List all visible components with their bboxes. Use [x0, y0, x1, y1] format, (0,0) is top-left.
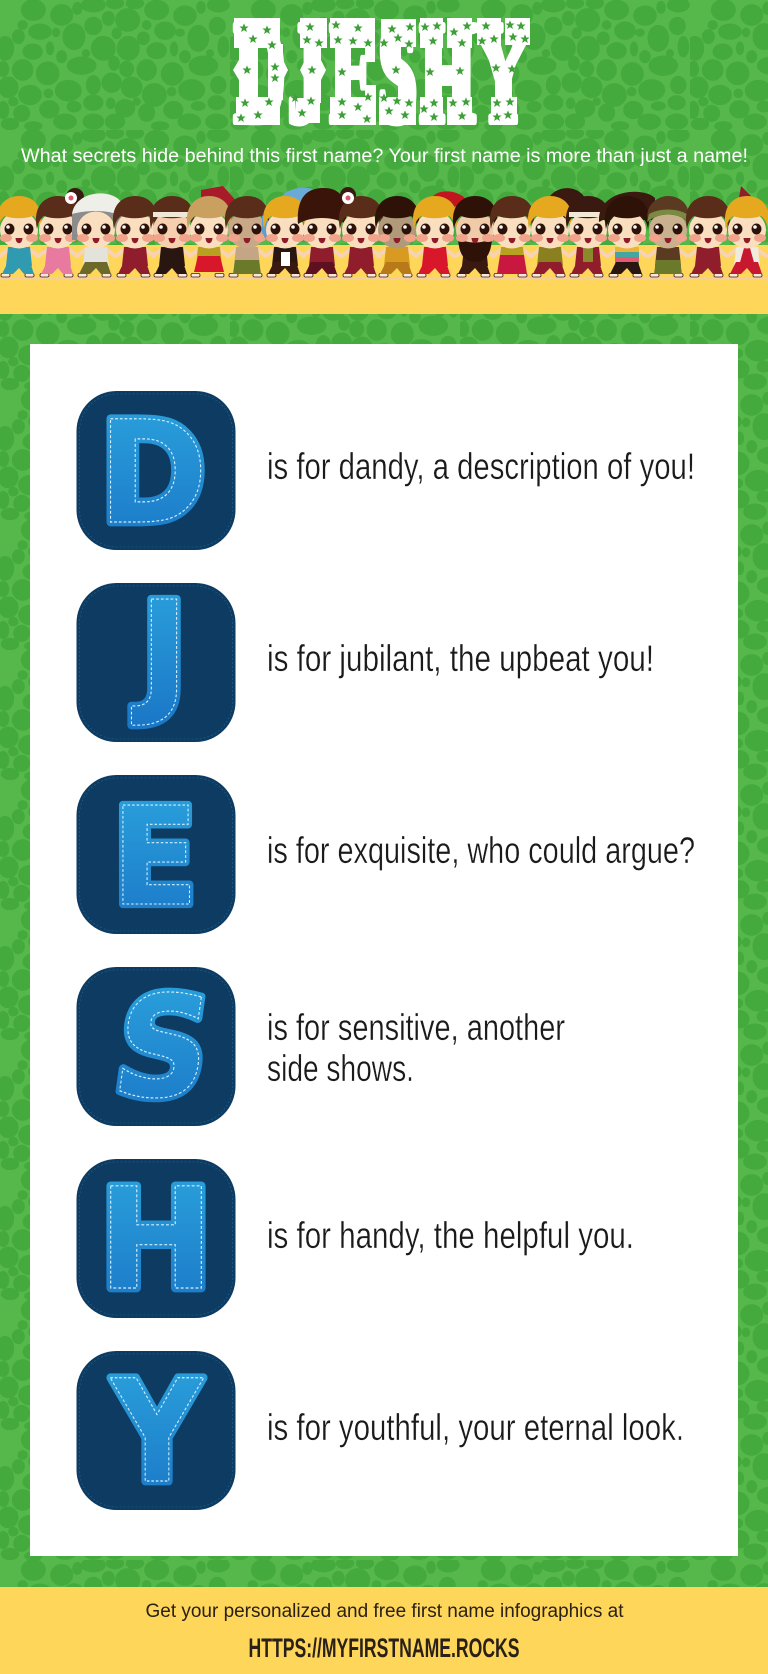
icon: letter D: D — [98, 391, 208, 556]
text: side shows: side shows. — [267, 1048, 414, 1089]
icon: letter S: S — [104, 967, 221, 1130]
text: sensitive: is for sensitive, another — [267, 1007, 565, 1048]
row: letter J — [76, 572, 654, 742]
row: letter D — [76, 391, 695, 556]
footer panel — [0, 1587, 768, 1674]
icon: letter J: J — [131, 572, 189, 730]
icon: letter Y — [76, 1350, 236, 1515]
row: letter S — [76, 967, 565, 1130]
icon: letter Y: Y — [110, 1350, 204, 1515]
row: letter E — [76, 775, 695, 937]
yellow band — [0, 245, 768, 314]
icon: letter D — [76, 391, 236, 556]
icon: letter E: E — [111, 779, 199, 937]
icon: letter E — [76, 775, 236, 937]
row: letter H — [76, 1158, 634, 1321]
row: letter Y — [76, 1350, 684, 1515]
text: handy: is for handy, the helpful you. — [267, 1215, 634, 1256]
panel: name letters — [30, 344, 738, 1556]
subtitle: What secrets hide behind this first name? Your first name is more than just a name! — [21, 146, 748, 167]
icon: letter J — [76, 572, 236, 742]
footer text: Get your personalized and free first name infographics at — [146, 1601, 624, 1622]
icon: letter H: H — [98, 1158, 214, 1321]
ground line — [0, 277, 768, 280]
footer link: HTTPS://MYFIRSTNAME.ROCKS — [248, 1633, 520, 1663]
text: jubilant: is for jubilant, the upbeat you! — [267, 638, 654, 679]
illustration: row of cartoon children — [0, 186, 768, 277]
